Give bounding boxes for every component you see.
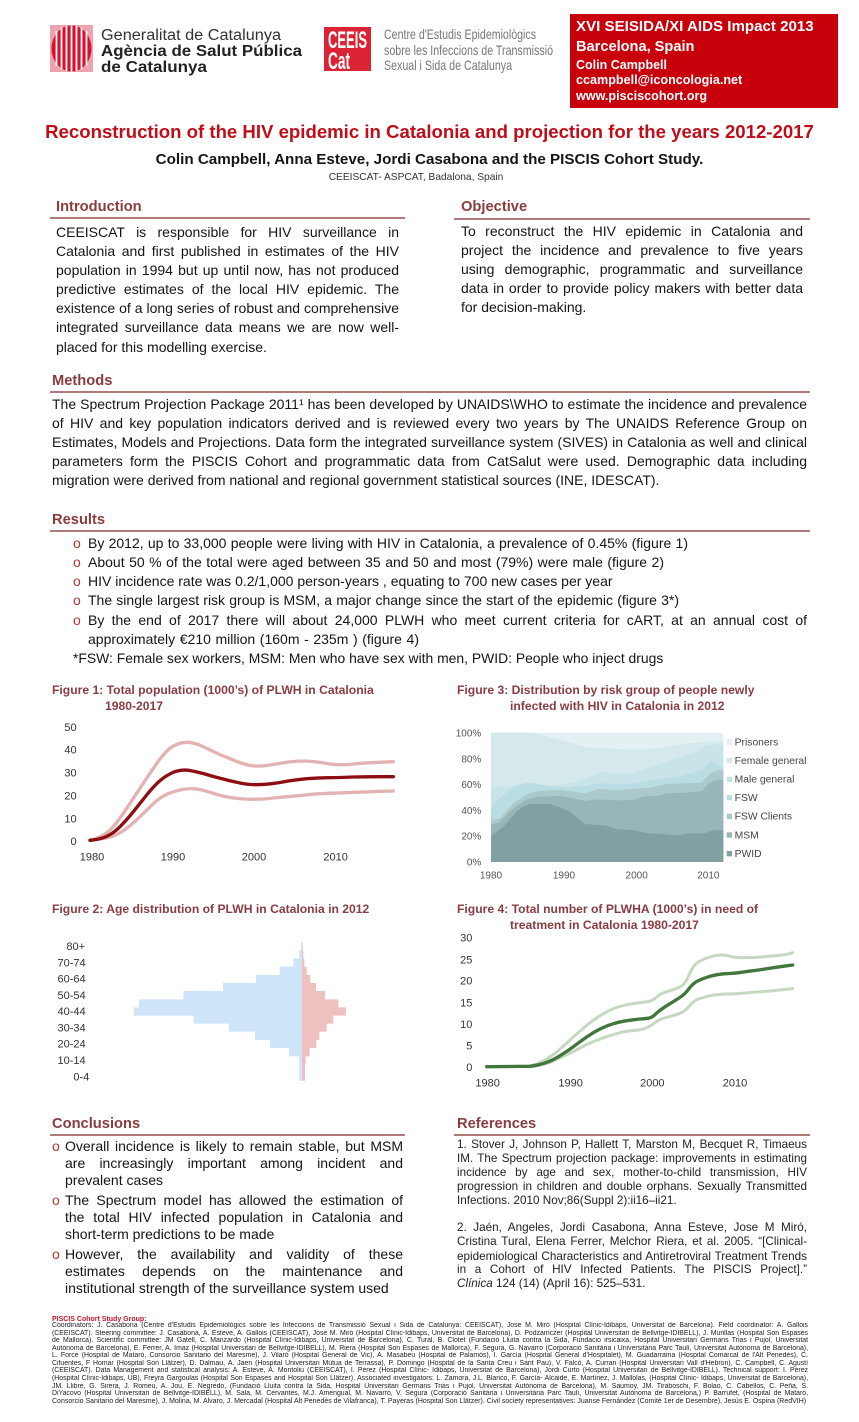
list: results bullets: o [73,592,81,608]
icon: CEEIS Cat red square [324,27,371,75]
text: objective body: data in order to provide policy makers with better data [461,280,803,296]
list: conclusions bullets: o [52,1138,60,1154]
stacked area chart: figure 3: 60% [461,780,481,791]
text: introduction body: existence of a long series of robust and comprehensive [56,300,399,316]
text: objective body: for decision-making. [461,299,586,315]
list: results bullets: HIV incidence rate was 0.2/1,000 person-years , equating to 700 new cases per year [88,573,613,589]
text: methods body: The Spectrum Projection Package 2011¹ has been developed by UNAIDS\WHO to estimate the incidence and prevalence [52,396,807,412]
panel: introduction [50,199,405,355]
footer heading: PISCIS Cohort Study Group: [52,1316,146,1323]
list: conclusions bullets: Overall incidence is likely to remain stable, but MSM [65,1138,403,1154]
footer: PISCIS cohort study group: Consorcio Sanitario del Maresme), J. Molina, M. Alvaro, J. Mercadal (Hospital Alt Penedès de Vilafranca), T. Payeras (Hospital Son Llätzer). Civil society representatives: Juanse Fernández (Comitè 1er de Desembre), Jesús E. Ospina (RedVIH) [52,1398,806,1405]
population pyramid: figure 2: 20-24 [58,1039,86,1051]
line chart: figure 1: 1990 [161,852,185,864]
text: references list: Clínica 124 (14) (April 16): 525–531. [457,1277,645,1290]
text: introduction body [56,224,399,355]
population pyramid: figure 2: 60-64 [58,974,86,986]
line chart: figure 1: 20 [64,790,77,802]
conference box: www.pisciscohort.org [576,89,707,103]
heading: figure 1: Figure 1: Total population (1000’s) of PLWH in Catalonia [52,683,374,697]
line chart: figure 4: 20 [460,976,472,988]
list: results bullets: By the end of 2017 there will about 24,000 PLWH who meet current criteria for cART, at an annual cost of [88,612,807,628]
heading: references: References [457,1116,536,1132]
population pyramid: figure 2: 40-44 [58,1006,86,1018]
heading: figure 4: Figure 4: Total number of PLWHA (1000’s) in need of [457,902,758,916]
text: references list: Infections. 2010 Nov;86(Suppl 2):ii16–ii21. [457,1194,677,1207]
list: conclusions bullets: o [52,1192,60,1208]
heading: objective: Objective [461,199,527,215]
list: results bullets: o [73,535,81,551]
line chart: figure 1: 10 [64,813,77,825]
icon: CEEIS Cat red square: Cat [328,48,350,75]
population pyramid: figure 2: 30-34 [58,1022,86,1034]
icon: striped emblem [50,25,93,72]
list: results bullets: o [73,573,81,589]
text: references list: epidemiological Characteristics and Antiretroviral Treatment Trends [457,1250,807,1263]
panel: references [454,1116,810,1290]
stacked area chart: figure 3: 2000 [626,870,648,881]
heading: figure 3: infected with HIV in Catalonia in 2012 [510,699,725,713]
list: results bullets: *FSW: Female sex workers, MSM: Men who have sex with men, PWID: People who inject drugs [73,650,663,666]
list: results bullets: o [73,612,81,628]
stacked area chart: figure 3: 80% [461,754,481,765]
text: introduction body: CEEISCAT is responsible for HIV surveillance in [56,224,399,240]
icon: CEEIS Cat red square: CEEIS [328,27,367,54]
panel: conclusions [50,1116,405,1296]
list: results bullets: The single largest risk group is MSM, a major change since the start of the epidemic (figure 3*) [88,592,679,608]
text: introduction body: predictive estimates of the local HIV epidemic. The [56,281,399,297]
conference box: ccampbell@iconcologia.net [576,73,742,87]
text: references list: 2. Jaén, Angeles, Jordi Casabona, Anna Esteve, Jose M Miró, [457,1221,807,1234]
list: conclusions bullets: o [52,1246,60,1262]
stacked area chart: figure 3: 20% [461,832,481,843]
population pyramid: figure 2: 10-14 [58,1055,86,1067]
footer: PISCIS cohort study group: JM. Llibre, G. Sirera, J. Romeu, A. Jou, E. Negredo, (Fundació Lluita contra la Sida, Hospital Universitari Germans Trias i Pujol, Universitat Autònoma de Barcelona), M. Saumoy, JM. Tiraboschi, F. Bolao, C. Cabellos, C. Peña, S. [52,1383,808,1390]
text: introduction body: placed for this modelling exercise. [56,339,267,355]
panel: objective [454,199,810,315]
stacked area chart: figure 3 [456,728,806,881]
stacked area chart: figure 3: 1980 [480,870,503,881]
legend: figure 3: FSW Clients [735,812,792,823]
logo text: Sexual i Sida de Catalunya [384,57,512,73]
heading: methods: Methods [52,373,112,389]
line chart: figure 4: 10 [460,1019,472,1031]
logo: CEEISCat [324,26,553,75]
text: references list: progression in children and double orphans. Sexually Transmitted [457,1180,807,1193]
list: results bullets: o [73,554,81,570]
line chart: figure 4: 2000 [640,1078,665,1090]
heading: conclusions: Conclusions [52,1116,140,1132]
list: conclusions bullets: are increasingly important among incident and [65,1155,403,1171]
affiliation: CEEISCAT- ASPCAT, Badalona, Spain [329,172,503,183]
list: conclusions bullets: estimates depends on the maintenance and [65,1263,403,1279]
list: conclusions bullets: The Spectrum model has allowed the estimation of [65,1192,403,1208]
text: methods body [52,396,807,488]
heading: figure 3 [457,683,754,713]
line chart: figure 1: 2000 [242,852,266,864]
population pyramid: figure 2 [58,941,346,1083]
line chart: figure 4: 2010 [723,1078,747,1090]
line chart: figure 4: 1990 [558,1078,583,1090]
footer: PISCIS cohort study group: DiYacovo (Hospital Universitari de Bellvitge-IDIBELL), M. Sala, M. Cervantes, M.J. Amengual, M. Navarro, V. Segura (Corporació Sanitària i Universitària Parc Taulí, Universitat Autònoma de Barcelona,) P. Barrufet, (Hospital de Mataró, [52,1390,808,1397]
line chart: figure 4: 0 [466,1062,472,1074]
list: conclusions bullets: However, the availability and validity of these [65,1246,403,1262]
conference box: XVI SEISIDA/XI AIDS Impact 2013 [576,18,814,35]
logo text [384,26,553,73]
line chart: figure 1: 30 [64,768,77,780]
text: references list: IM. The Spectrum projection package: improvements in estimating [457,1152,807,1165]
legend: figure 3: FSW [735,793,758,804]
line chart: figure 4: 30 [460,933,472,945]
stacked area chart: figure 3: 100% [456,728,481,739]
heading: figure 1 [52,683,374,713]
footer: PISCIS cohort study group: (Hospital Clínic-Idibaps, UB), Freyra Gargoulas (Hospital Son Espases and Hospital Son Llätzer). Associated investigators: L. Zamora, J.L. Blanco, F. García- Alcaide, E. Martínez, J. Mallolas, (Hospital Clínic- Idibaps, Universitat de Barcelona), [52,1375,808,1382]
footer: PISCIS cohort study group: (CEEISCAT). Data Management and statistical analysis: A. Esteve, A. Montoliu (CEEISCAT), I. Pérez (Hospital Clínic- Idibaps, Universitat de Barcelona), Jordi Curto (Hospital Universitari de Bellvitge-IDIBELL). Technical support: I. Pérez [52,1367,808,1374]
text: references list: incidence by age and sex, mother-to-child transmission, HIV [457,1166,807,1179]
line chart: figure 1: 1980 [80,852,104,864]
heading: introduction: Introduction [56,199,142,215]
footer: PISCIS cohort study group: Autònoma de Barcelona), E. Ferrer, A. Imaz (Hospital Universitari de Bellvitge-IDIBELL), M. Riera (Hospital Son Espases de Mallorca), F. Segura, G. Navarro (Corporació Sanitària i Universitària Parc Taulí, Universitat Autònoma de Barcelona), [52,1345,808,1352]
text: references list [457,1138,807,1290]
population pyramid: figure 2: 0-4 [73,1071,89,1083]
text: methods body: Estimates, Models and Projections. Data form the integrated surveillance system (SIVES) in Catalonia as well and clinical [52,434,807,450]
footer: PISCIS cohort study group [52,1316,808,1405]
stacked area chart: figure 3: 40% [461,806,481,817]
population pyramid: figure 2: 70-74 [58,957,86,969]
text: objective body: project the incidence and prevalence to five years [461,242,803,258]
panel: methods [50,373,810,488]
list: conclusions bullets: institutional strength of the surveillance system used [65,1280,389,1296]
stacked area chart: figure 3: 2010 [697,870,720,881]
population pyramid: figure 2: 50-54 [58,990,86,1002]
footer: PISCIS cohort study group: (CEEISCAT). Steering committee: J. Casabona, A. Esteve, A. Gallois (CEEISCAT), Jose M. Miró (Hospital Clínic-Idibaps, Universitat de Barcelona), D. Podzamczer (Hospital Universitari de Bellvitge-IDIBELL), J. Murillas (Hospital Son Espases [52,1330,808,1337]
title: Reconstruction of the HIV epidemic in Catalonia and projection for the years 2012-2017 [45,121,814,142]
list: results bullets: About 50 % of the total were aged between 35 and 50 and most (79%) were male (figure 2) [88,554,664,570]
text: references list: 1. Stover J, Johnson P, Hallett T, Marston M, Becquet R, Timaeus [457,1138,807,1151]
legend: figure 3: PWID [735,849,762,860]
line chart: figure 1: 2010 [323,852,348,864]
text: objective body: using demographic, programmatic and surveillance [461,261,803,277]
list: results bullets: By 2012, up to 33,000 people were living with HIV in Catalonia, a prevalence of 0.45% (figure 1) [88,535,688,551]
line chart: figure 4: 15 [460,997,472,1009]
logo text [101,27,302,76]
footer: PISCIS cohort study group: L. Force (Hospital de Mataró, Consorcio Sanitario del Maresme), J. Vilaró (Hospital General de Vic), A. Masabeu (Hospital de Palamós), I. García (Hospital General d'Hospitalet), M. Guadarrama (Hospital Comarcal de l'Alt Penedès), C. [52,1352,808,1359]
line chart: figure 1 [64,722,395,864]
list: conclusions bullets [52,1138,403,1296]
logo text: Generalitat de Catalunya [101,27,281,44]
legend: figure 3: Prisoners [735,737,778,748]
population pyramid: figure 2: 80+ [66,941,85,953]
text: methods body: migration were derived from national and regional government statistical sources (INE, IDESCAT). [52,472,659,488]
heading: figure 3: Figure 3: Distribution by risk group of people newly [457,683,754,697]
text: methods body: of HIV and key population indicators derived and is reviewed every two years by The UNAIDS Reference Group on [52,415,807,431]
list: conclusions bullets: the total HIV infected population in Catalonia and [65,1209,403,1225]
text: references list: Cristina Tural, Elena Ferrer, Melchor Riera, et al. 2005. “[Clinical- [457,1235,807,1248]
text: objective body: To reconstruct the HIV epidemic in Catalonia and [461,223,803,239]
legend: figure 3: Female general [735,756,806,767]
heading: figure 4 [457,902,758,932]
heading: figure 2: Figure 2: Age distribution of PLWH in Catalonia in 2012 [52,902,369,916]
line chart: figure 4: 25 [460,954,472,966]
text: methods body: parameters form the PISCIS Cohort and programmatic data from CatSalut were used. Demographic data including [52,453,807,469]
list: conclusions bullets: short-term predictions to be made [65,1226,274,1242]
legend: figure 3 [727,737,806,860]
line chart: figure 1: 50 [64,722,77,734]
heading: figure 4: treatment in Catalonia 1980-2017 [510,918,699,932]
text: introduction body: integrated surveillance data means we are now well- [56,319,399,335]
list: conclusions bullets: prevalent cases [65,1172,163,1188]
heading: results: Results [52,512,105,528]
line chart: figure 4: 1980 [475,1078,500,1090]
footer: PISCIS cohort study group: Cifuentes, F Homar (Hospital Son Llätzer), D. Dalmau, À. Jaen (Hospital Universitari Mútua de Terrassa), P. Domingo (Hospital de la Santa Creu i Sant Pau), V. Falcó, A. Curran (Hospital Universitari Vall d'Hebron), C. Campbell, C. Agustí [52,1360,808,1367]
text: objective body [461,223,803,315]
logo text: de Catalunya [101,59,207,76]
heading: figure 1: 1980-2017 [105,699,163,713]
logo text: Centre d'Estudis Epidemiològics [384,26,536,42]
authors: Colin Campbell, Anna Esteve, Jordi Casabona and the PISCIS Cohort Study. [156,151,703,168]
logo: Generalitat de Catalunya [50,25,302,76]
conference box [570,14,838,108]
stacked area chart: figure 3: 1990 [553,870,576,881]
text: introduction body: population in 1994 but up until now, has not produced [56,262,399,278]
stacked area chart: figure 3: 0% [467,858,481,869]
line chart: figure 1: 0 [71,836,77,848]
line chart: figure 1: 40 [64,745,77,757]
legend: figure 3: MSM [735,830,759,841]
list: results bullets: approximately €210 million (160m - 235m ) (figure 4) [88,631,419,647]
text: introduction body: Catalonia and first published in estimates of the HIV [56,243,399,259]
footer: PISCIS cohort study group: de Mallorca). Scientific committee: JM Gatell, C. Manzardo (Hospital Clínic-Idibaps, Universitat de Barcelona), C. Tural, B. Clotet (Fundació Lluita contra la Sida, Fundacio irsicaixa, Hospital Universitari Germans Trias i Pujol, Universitat [52,1337,808,1344]
panel: results [50,512,810,666]
logo text: Agència de Salut Pública [101,43,302,60]
line chart: figure 4: 5 [466,1040,472,1052]
conference box: Barcelona, Spain [576,39,694,55]
legend: figure 3: Male general [735,775,794,786]
conference box: Colin Campbell [576,58,667,72]
logo text: sobre les Infeccions de Transmissió [384,42,553,58]
footer: PISCIS cohort study group: Coordinators: J. Casabona (Centre d'Estudis Epidemiològics sobre les Infeccions de Transmissió Sexual i Sida de Catalunya: CEEISCAT), Jose M. Miró (Hospital Clínic-Idibaps, Universitat de Barcelona). Field coordinator: A. Gallois [52,1322,808,1329]
line chart: figure 4 [460,933,794,1090]
list: results bullets [73,535,807,666]
